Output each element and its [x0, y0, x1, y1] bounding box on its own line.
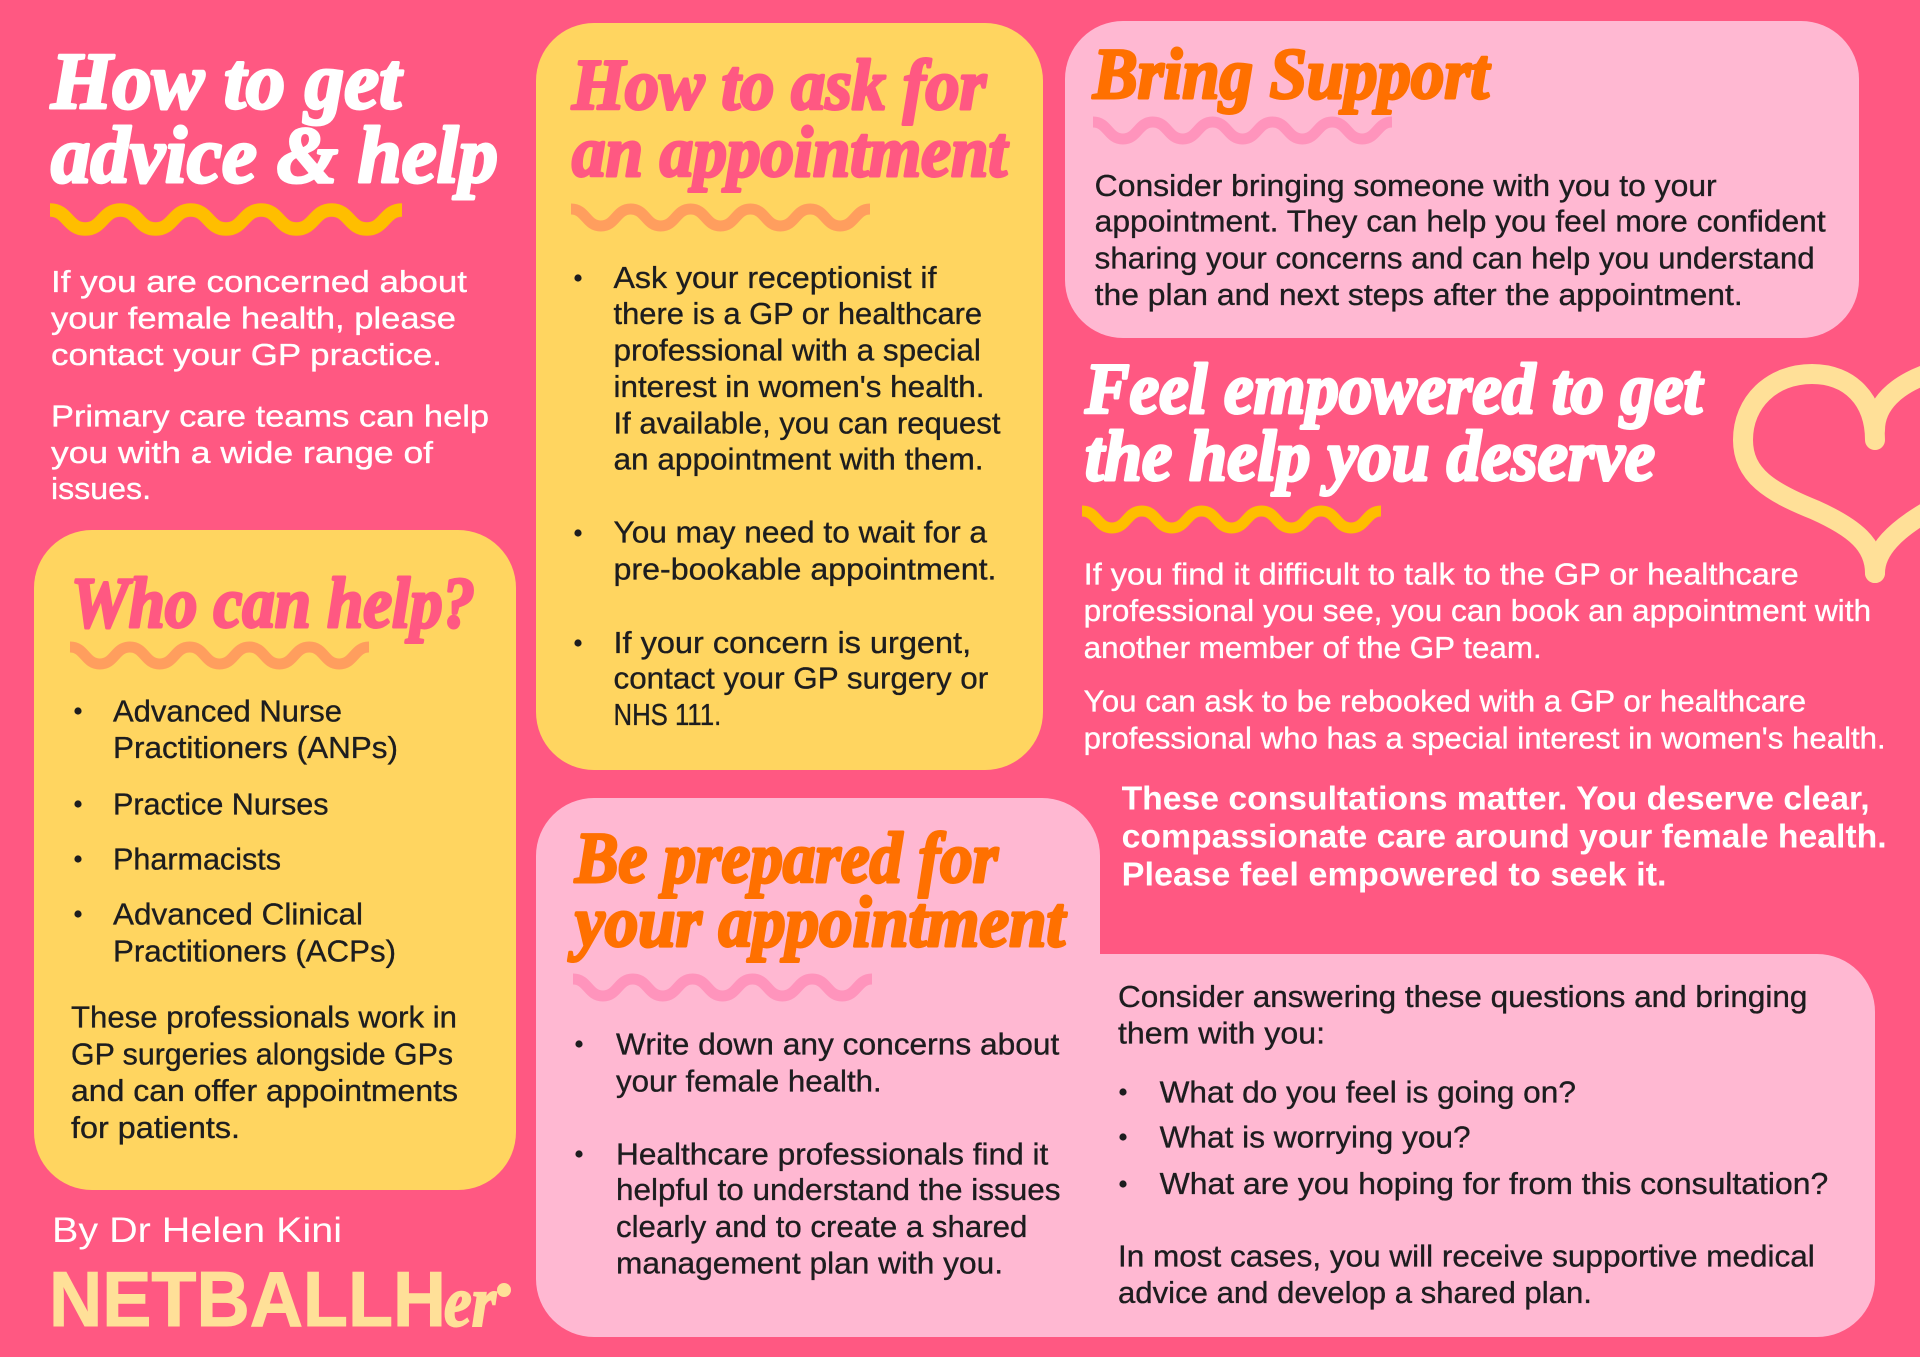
heading: feel empowered: the help you deserve [1085, 416, 1655, 496]
list: how to ask [574, 260, 1001, 732]
list: how to ask: You may need to wait for a [614, 515, 988, 550]
heading: how to ask [571, 45, 1009, 192]
text block: professionals note [71, 1000, 458, 1145]
callout: consultations matter [1122, 779, 1887, 892]
text block: introduction: contact your GP practice. [51, 337, 442, 372]
list: how to ask: interest in women's health. [614, 369, 984, 404]
text block: introduction: issues. [51, 471, 151, 506]
list: how to ask: If your concern is urgent, [614, 625, 971, 660]
text block: professionals note: GP surgeries alongside GPs [71, 1036, 453, 1071]
text block: feel empowered: If you find it difficult to talk to the GP or healthcare [1084, 556, 1799, 591]
text block: feel empowered [1084, 556, 1886, 755]
panel: be prepared for your appointment [536, 798, 1875, 1337]
text block: shared plan: In most cases, you will receive supportive medical [1118, 1238, 1815, 1273]
callout: consultations matter: Please feel empowered to seek it. [1122, 855, 1667, 892]
list: how to ask: Ask your receptionist if [614, 260, 937, 295]
text block: shared plan [1118, 1238, 1815, 1310]
callout: consultations matter: compassionate care around your female health. [1122, 817, 1887, 854]
wave underline: bring support [1093, 122, 1392, 139]
callout: consultations matter: These consultations matter. You deserve clear, [1122, 779, 1870, 816]
wave underline: feel empowered [1082, 511, 1381, 528]
list: professionals: Advanced Nurse [113, 694, 342, 728]
list: be prepared: Healthcare professionals find it [616, 1137, 1049, 1172]
list: be prepared: management plan with you. [616, 1246, 1003, 1281]
text block: feel empowered: professional who has a special interest in women's health. [1084, 720, 1886, 755]
heading: be prepared [568, 818, 1067, 962]
list: professionals: Advanced Clinical [113, 897, 363, 932]
text block: bring support: Consider bringing someone with you to your [1095, 168, 1717, 203]
panel: who can help [34, 530, 516, 1190]
heading: who can help: Who can help? [71, 563, 475, 643]
list: be prepared: clearly and to create a shared [616, 1209, 1027, 1244]
text block: introduction: you with a wide range of [51, 435, 433, 470]
text block: introduction [51, 264, 489, 506]
list: how to ask: contact your GP surgery or [614, 660, 988, 695]
list: how to ask: professional with a special [614, 332, 981, 368]
list: be prepared: helpful to understand the issues [616, 1172, 1060, 1207]
list: professionals: Practitioners (ACPs) [113, 934, 396, 968]
heading: be prepared: Be prepared for [574, 818, 999, 898]
wave underline: who can help [70, 647, 369, 664]
text block: feel empowered: another member of the GP team. [1084, 630, 1542, 665]
logo: netballher: er [444, 1262, 497, 1342]
text block: questions intro: them with you: [1118, 1016, 1325, 1050]
heading: how to ask: How to ask for [571, 45, 987, 125]
list: professionals: Pharmacists [113, 842, 281, 877]
heading: feel empowered: Feel empowered to get [1084, 349, 1704, 429]
heading: bring support: Bring Support [1092, 34, 1491, 114]
list: questions [1119, 1074, 1828, 1201]
text block: feel empowered: You can ask to be rebooked with a GP or healthcare [1084, 684, 1806, 719]
text block: shared plan: advice and develop a shared plan. [1118, 1275, 1592, 1310]
title: how to get advice and help [50, 38, 498, 200]
text block: professionals note: and can offer appointments [71, 1073, 458, 1108]
list: professionals: Practitioners (ANPs) [113, 730, 398, 765]
list: how to ask: pre-bookable appointment. [614, 551, 996, 586]
text block: bring support [1095, 168, 1826, 312]
text block: questions intro: Consider answering these questions and bringing [1118, 979, 1807, 1014]
text block: professionals note: These professionals work in [71, 1000, 457, 1035]
list: how to ask: If available, you can request [614, 406, 1001, 441]
list: how to ask: NHS 111. [614, 697, 721, 732]
wave underline: how to ask [571, 209, 870, 226]
text block: professionals note: for patients. [71, 1110, 240, 1145]
icon: heart outline [1743, 373, 1920, 573]
logo: netballher: H [393, 1255, 446, 1343]
heading: how to ask: an appointment [572, 112, 1009, 192]
list: how to ask: there is a GP or healthcare [614, 296, 982, 331]
wave underline: title [50, 210, 402, 229]
list: how to ask: an appointment with them. [614, 442, 984, 476]
title: how to get advice and help: advice & help [51, 112, 498, 200]
list: questions: What do you feel is going on? [1160, 1074, 1576, 1109]
text block: bring support: the plan and next steps after the appointment. [1095, 277, 1743, 312]
text block: introduction: Primary care teams can help [51, 398, 489, 434]
wave underline: be prepared [573, 979, 872, 996]
list: be prepared: your female health. [616, 1063, 882, 1098]
heading: be prepared: your appointment [568, 882, 1067, 962]
list: professionals [74, 694, 398, 968]
panel: how to ask for an appointment [536, 23, 1043, 770]
list: be prepared: Write down any concerns about [616, 1026, 1060, 1062]
text block: bring support: appointment. They can help you feel more confident [1095, 204, 1826, 239]
list: be prepared [575, 1026, 1060, 1281]
text block: feel empowered: professional you see, you can book an appointment with [1084, 593, 1871, 628]
list: questions: What is worrying you? [1160, 1120, 1471, 1155]
text block: introduction: If you are concerned about [51, 264, 467, 299]
logo: netballher: NETBALL [49, 1255, 393, 1343]
text block: introduction: your female health, please [51, 300, 456, 336]
byline: By Dr Helen Kini [52, 1211, 342, 1250]
panel: bring support [1065, 21, 1859, 338]
text block: questions intro [1118, 979, 1807, 1050]
list: professionals: Practice Nurses [113, 786, 328, 822]
title: how to get advice and help: How to get [50, 38, 404, 126]
list: questions: What are you hoping for from this consultation? [1160, 1166, 1828, 1201]
heading: feel empowered [1084, 349, 1704, 496]
text block: bring support: sharing your concerns and can help you understand [1095, 240, 1815, 275]
